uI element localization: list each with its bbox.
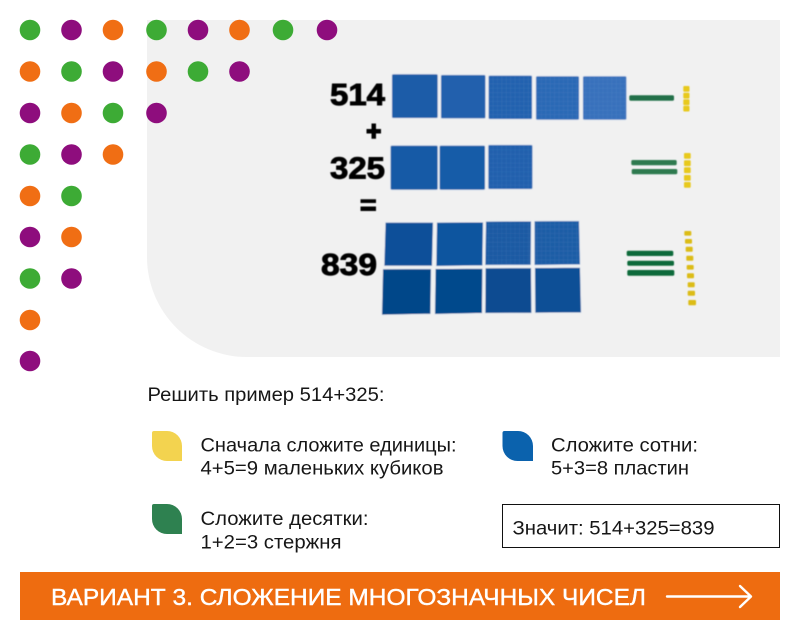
result box: Значит: 514+325=839	[512, 517, 714, 539]
tens text: 1+2=3 стержня	[200, 531, 342, 553]
panel: grey illustration background	[147, 20, 780, 357]
result box	[502, 504, 780, 548]
icon: green leaf	[152, 504, 182, 534]
number 514: 514	[330, 78, 385, 112]
equals sign	[360, 199, 376, 211]
rods for 325	[631, 160, 677, 174]
number 839: 839	[321, 248, 377, 282]
title banner	[20, 572, 780, 620]
hundreds text: Сложите сотни:	[551, 434, 698, 456]
banner title: ВАРИАНТ 3. СЛОЖЕНИЕ МНОГОЗНАЧНЫХ ЧИСЕЛ	[51, 584, 646, 610]
plus sign	[366, 124, 381, 139]
cubes for 325	[684, 153, 691, 188]
rod for 514	[629, 95, 674, 101]
units text: 4+5=9 маленьких кубиков	[200, 457, 444, 479]
step: hundreds	[502, 431, 698, 479]
icon: blue leaf	[502, 431, 533, 461]
icon: yellow leaf	[152, 431, 182, 461]
step: units	[152, 431, 456, 479]
rods for 839	[627, 251, 674, 276]
plates for 325	[390, 145, 533, 190]
decorative dots grid	[20, 20, 337, 371]
task heading: Решить пример 514+325:	[148, 384, 384, 406]
plates for 839	[382, 221, 581, 315]
hundreds text: 5+3=8 пластин	[551, 457, 689, 479]
step: tens	[152, 504, 368, 553]
cubes for 514	[683, 86, 690, 112]
illustration: base-ten blocks equation	[321, 74, 696, 315]
plates for 514	[392, 74, 627, 120]
number 325: 325	[330, 151, 385, 185]
cubes for 839	[684, 231, 696, 305]
arrow	[667, 586, 751, 607]
units text: Сначала сложите единицы:	[200, 434, 456, 456]
tens text: Сложите десятки:	[200, 508, 368, 530]
